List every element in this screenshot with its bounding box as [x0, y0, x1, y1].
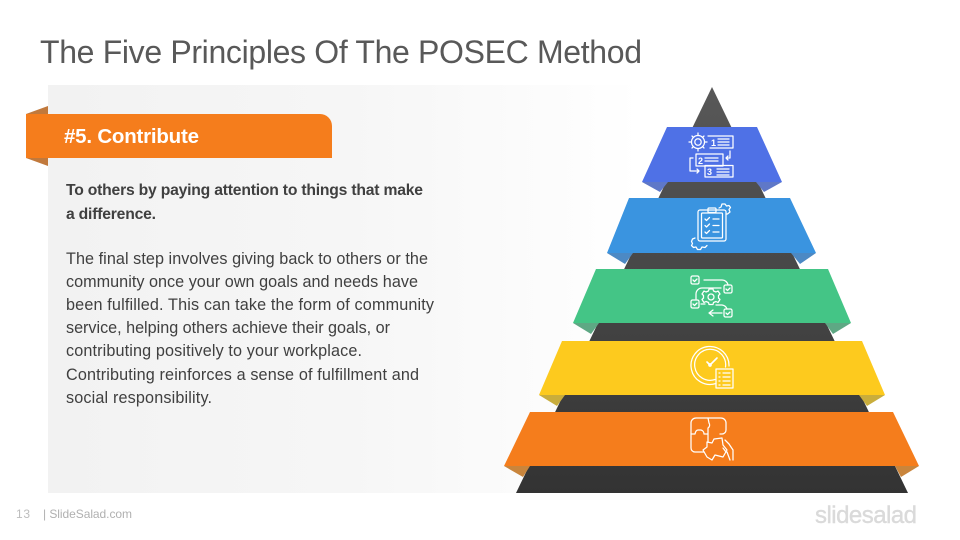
panel: principle description: [26, 85, 640, 493]
bold intro text: a difference.: [66, 206, 156, 223]
icon: puzzle and hand: [691, 418, 733, 460]
ribbon band: [26, 114, 332, 158]
icon: process flow with gear: [691, 276, 732, 317]
title: The Five Principles Of The POSEC Method: [40, 34, 642, 70]
icon number labels: 2: [698, 156, 703, 166]
icon: clock and schedule: [691, 346, 733, 388]
dark pyramid body: [516, 87, 908, 493]
footer page number: 13: [16, 507, 30, 521]
ribbon folds: [26, 106, 48, 166]
body text: contributing positively to your workplace.: [66, 342, 362, 360]
tier 3: green: [573, 269, 851, 334]
pyramid chart: [504, 87, 919, 493]
body text: [66, 250, 435, 407]
tier 1: violet blue: [642, 127, 782, 192]
body text: been fulfilled. This can take the form of community: [66, 296, 435, 314]
body text: Contributing reinforces a sense of fulfillment and: [66, 366, 419, 384]
panel background: [48, 85, 640, 493]
body text: The final step involves giving back to others or the: [66, 250, 428, 268]
tier 5: orange: [504, 412, 919, 477]
body text: social responsibility.: [66, 389, 212, 407]
bold intro text: To others by paying attention to things that make: [66, 182, 423, 199]
tier 2: blue: [607, 198, 816, 264]
heading ribbon: [26, 106, 332, 166]
footer source text: | SlideSalad.com: [43, 507, 132, 521]
icon: gear and numbered steps: [689, 133, 733, 177]
body text: community once your own goals and needs have: [66, 273, 418, 291]
icon number labels: 3: [707, 167, 712, 177]
tier 4: yellow: [539, 341, 885, 406]
body text: service, helping others achieve their goals, or: [66, 319, 391, 337]
ribbon heading: #5. Contribute: [64, 125, 199, 148]
bold intro text: [66, 182, 423, 223]
icon number labels: [698, 138, 716, 177]
logo: slidesalad: slidesalad: [815, 502, 917, 529]
icon: clipboard checklist: [692, 204, 730, 250]
icon number labels: 1: [711, 138, 716, 148]
